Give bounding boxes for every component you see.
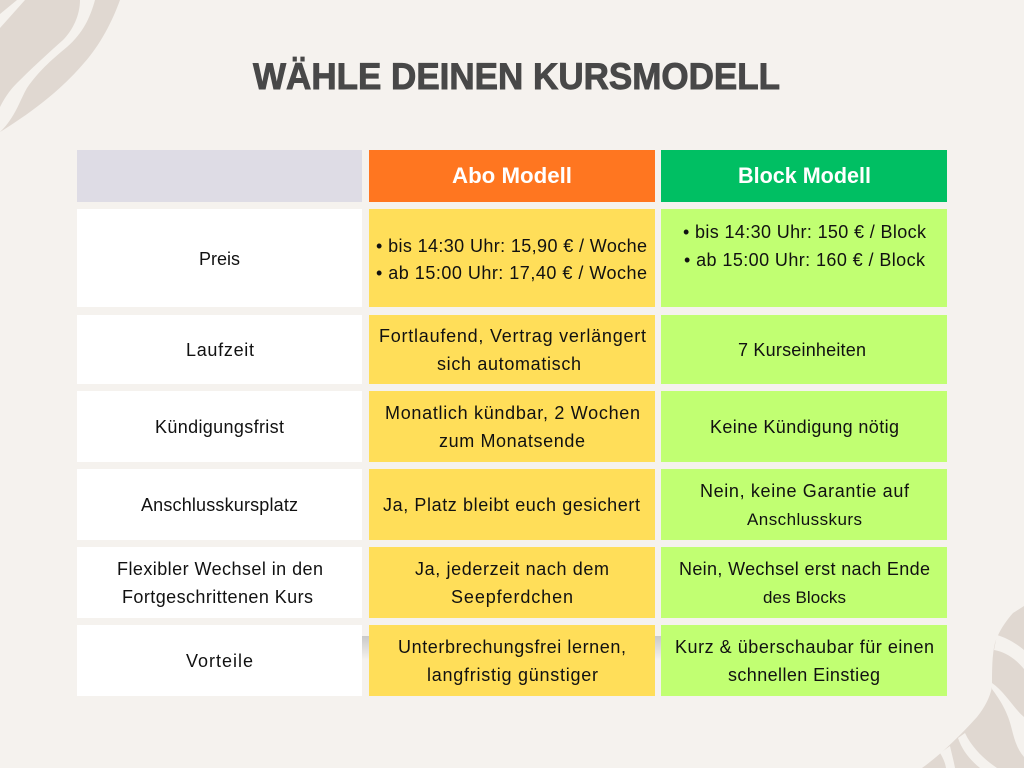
row label: Laufzeit: Laufzeit <box>186 340 254 360</box>
row label: Laufzeit <box>77 315 362 384</box>
row label: Vorteile <box>77 625 362 696</box>
Abo Vorteile: langfristig günstiger <box>427 665 598 685</box>
row label: Vorteile: Vorteile <box>186 651 253 671</box>
header: Abo Modell <box>369 150 655 202</box>
Block Wechsel: des Blocks <box>763 588 846 607</box>
Abo price: • bis 14:30 Uhr: 15,90 € / Woche <box>376 236 647 256</box>
Block Kündigungsfrist: Keine Kündigung nötig <box>710 417 899 437</box>
Block price: • ab 15:00 Uhr: 160 € / Block <box>684 250 926 270</box>
decoration: top-left leaf <box>0 0 120 132</box>
Block Laufzeit: 7 Kurseinheiten <box>738 340 866 360</box>
Block Laufzeit <box>661 315 947 384</box>
Abo Kündigungsfrist <box>369 391 655 462</box>
Abo Wechsel <box>369 547 655 618</box>
Abo Laufzeit: Fortlaufend, Vertrag verlängert <box>379 326 646 346</box>
row label: Anschlusskursplatz: Anschlusskursplatz <box>141 495 298 515</box>
decoration: bottom-right leaf <box>922 606 1024 768</box>
row label: Kündigungsfrist: Kündigungsfrist <box>155 417 284 437</box>
Block Kündigungsfrist <box>661 391 947 462</box>
Abo Anschlusskursplatz: Ja, Platz bleibt euch gesichert <box>383 495 640 515</box>
Block Anschlusskursplatz: Anschlusskurs <box>747 510 862 529</box>
Block Vorteile: schnellen Einstieg <box>728 665 880 685</box>
title: WÄHLE DEINEN KURSMODELL <box>253 56 780 97</box>
header: empty corner cell <box>77 150 362 202</box>
Abo Vorteile <box>369 625 655 696</box>
Block Vorteile: Kurz & überschaubar für einen <box>675 637 934 657</box>
header: Block Modell <box>661 150 947 202</box>
row label: Kündigungsfrist <box>77 391 362 462</box>
Block Anschlusskursplatz <box>661 469 947 540</box>
decorative shadow strip <box>362 636 662 660</box>
row label: Flexibler Wechsel <box>77 547 362 618</box>
Block Anschlusskursplatz: Nein, keine Garantie auf <box>700 481 910 501</box>
row label: Flexibler Wechsel: Flexibler Wechsel in den <box>117 559 323 579</box>
Block Vorteile <box>661 625 947 696</box>
Abo Laufzeit <box>369 315 655 384</box>
Abo Laufzeit: sich automatisch <box>437 354 581 374</box>
row label: Anschlusskursplatz <box>77 469 362 540</box>
Block price: • bis 14:30 Uhr: 150 € / Block <box>683 222 927 242</box>
row label: Flexibler Wechsel: Fortgeschrittenen Kurs <box>122 587 313 607</box>
Block Wechsel <box>661 547 947 618</box>
Abo price: • ab 15:00 Uhr: 17,40 € / Woche <box>376 263 647 283</box>
Block Wechsel: Nein, Wechsel erst nach Ende <box>679 559 930 579</box>
Abo Anschlusskursplatz <box>369 469 655 540</box>
row label: Preis <box>77 209 362 307</box>
row label: Preis: Preis <box>199 249 240 269</box>
Abo Kündigungsfrist: Monatlich kündbar, 2 Wochen <box>385 403 640 423</box>
header: Block Modell: Block Modell <box>738 163 871 188</box>
Abo Wechsel: Seepferdchen <box>451 587 573 607</box>
header: Abo Modell: Abo Modell <box>452 163 572 188</box>
Abo Vorteile: Unterbrechungsfrei lernen, <box>398 637 626 657</box>
Abo Kündigungsfrist: zum Monatsende <box>439 431 585 451</box>
Abo price <box>369 209 655 307</box>
Block price <box>661 209 947 307</box>
Abo Wechsel: Ja, jederzeit nach dem <box>415 559 609 579</box>
